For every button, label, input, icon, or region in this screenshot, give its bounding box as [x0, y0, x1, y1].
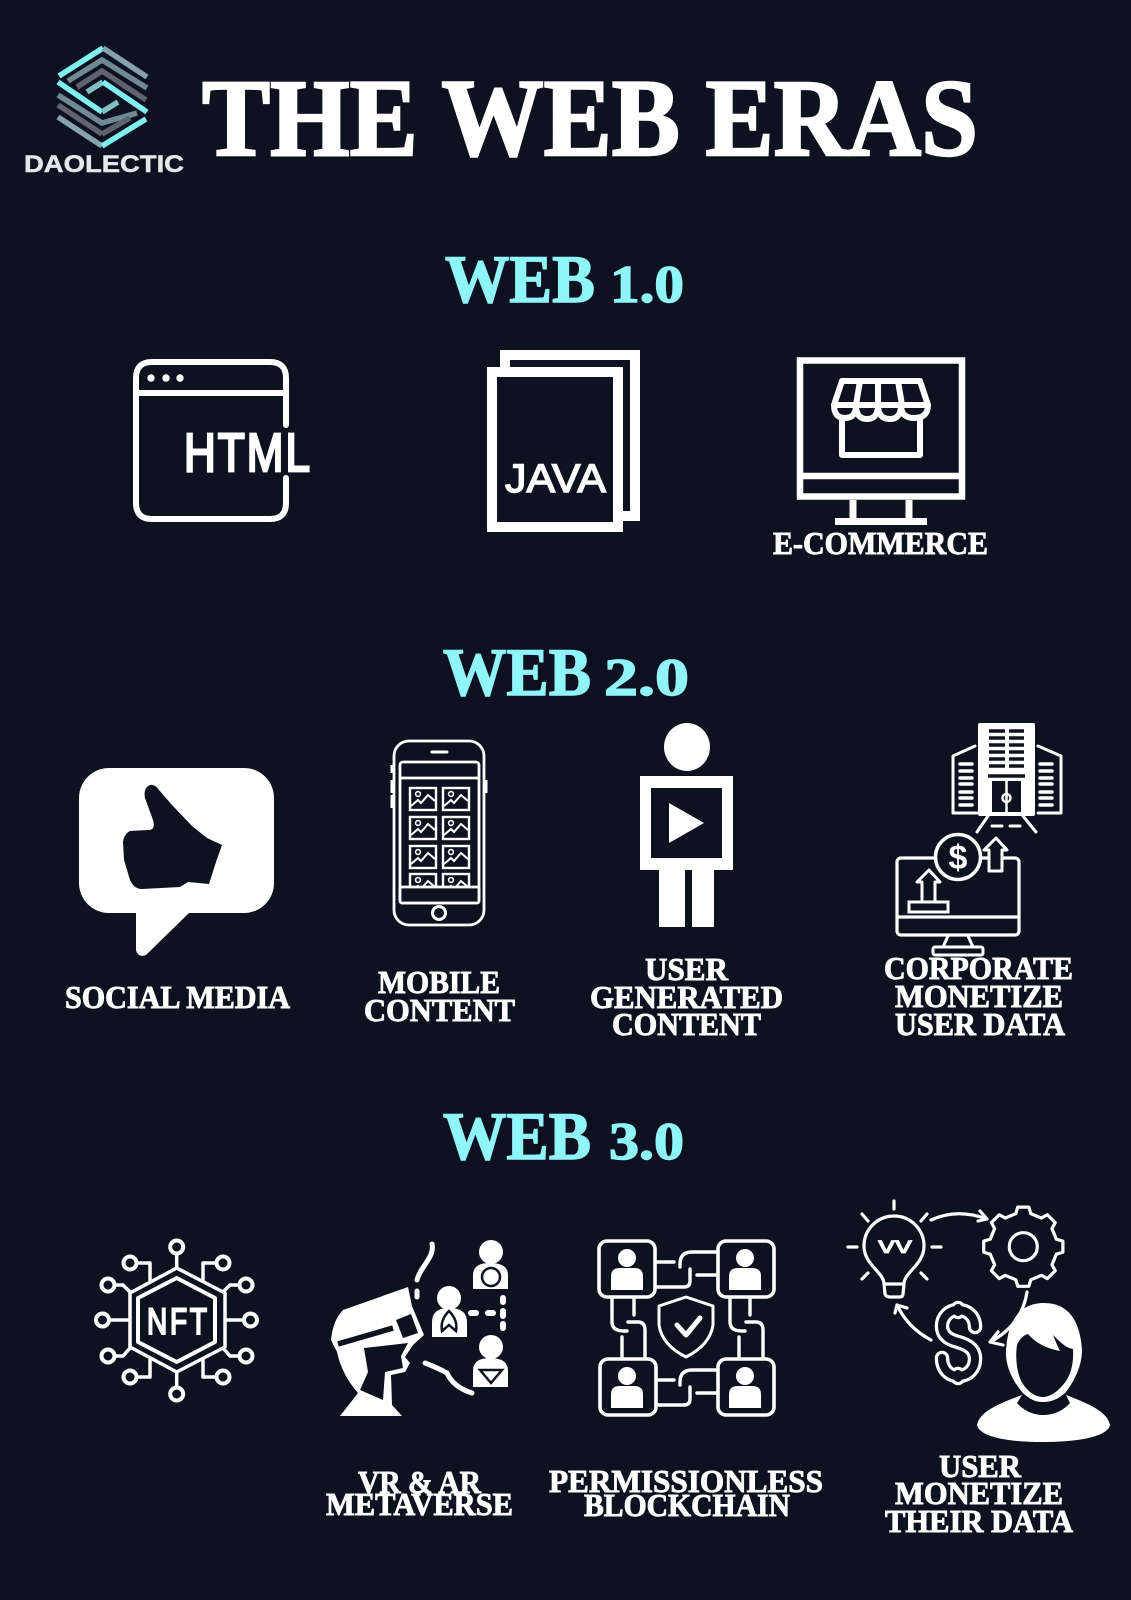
logo wordmark: DAOLECTIC	[24, 151, 184, 178]
lightbulb	[848, 1201, 941, 1297]
arrow: bulb to gear	[931, 1211, 987, 1221]
label: permissionless blockchain: PERMISSIONLESS	[549, 1463, 823, 1499]
heading: Web 1.0	[445, 241, 684, 317]
heading: Web 2.0	[443, 634, 689, 710]
heading: Web 2.0: WEB	[443, 634, 591, 710]
label: mobile content: CONTENT	[364, 992, 515, 1028]
label: user monetize their data: MONETIZE	[895, 1475, 1063, 1511]
label: user generated content	[590, 951, 783, 1042]
gear	[984, 1207, 1063, 1286]
logo: Daolectic	[24, 48, 184, 178]
label: VR & AR metaverse: VR & AR	[358, 1464, 482, 1500]
lightbulb: vv	[878, 1232, 913, 1258]
label: VR & AR metaverse: METAVERSE	[326, 1486, 513, 1522]
label: user monetize their data: THEIR DATA	[885, 1503, 1073, 1539]
label: e-commerce: E-COMMERCE	[773, 525, 988, 561]
icon: outlined dollar symbol	[942, 1308, 975, 1378]
label: permissionless blockchain	[549, 1463, 823, 1523]
heading: Web 3.0: WEB	[443, 1098, 591, 1174]
icon: NFT hexagon circuit: NFT	[147, 1300, 207, 1342]
logo mark	[58, 48, 147, 146]
label: user monetize their data	[885, 1448, 1073, 1539]
label: permissionless blockchain: BLOCKCHAIN	[584, 1487, 790, 1523]
label: user monetize their data: USER	[939, 1448, 1022, 1484]
icon: NFT hexagon circuit	[96, 1240, 257, 1400]
heading: Web 3.0	[443, 1098, 684, 1174]
heading: Web 2.0: 2.0	[604, 649, 689, 707]
icon: HTML browser window	[136, 362, 310, 519]
icon: corporate monetization monitor: $	[949, 839, 968, 877]
icon: person with video play screen	[640, 723, 733, 927]
label: user generated content: USER	[645, 951, 729, 987]
icon: e-commerce monitor with store	[800, 360, 962, 525]
label: VR & AR metaverse	[326, 1464, 513, 1522]
label: corporate monetize user data	[884, 950, 1073, 1042]
label: user generated content: CONTENT	[612, 1006, 761, 1042]
icon: VR and AR metaverse headset user	[331, 1240, 508, 1416]
label: social media: SOCIAL MEDIA	[65, 979, 290, 1015]
icon: mobile phone with pictures	[392, 741, 486, 925]
label: corporate monetize user data: USER DATA	[895, 1006, 1065, 1042]
icon: permissionless blockchain network	[599, 1241, 774, 1415]
heading: Web 3.0: 3.0	[609, 1113, 684, 1171]
label: corporate monetize user data: MONETIZE	[895, 978, 1063, 1014]
icon: HTML browser window: HTML	[184, 424, 310, 483]
icon: corporate building	[953, 723, 1061, 832]
label: user generated content: GENERATED	[590, 979, 783, 1015]
icon: corporate monetization monitor	[897, 834, 1019, 955]
title: THE WEB ERAS	[202, 57, 978, 179]
heading: Web 1.0: WEB	[445, 241, 595, 317]
label: mobile content	[364, 964, 515, 1028]
icon: social media thumbs-up bubble	[79, 768, 274, 956]
label: mobile content: MOBILE	[378, 964, 500, 1000]
user silhouette	[977, 1303, 1110, 1442]
icon: Java document pages: JAVA	[505, 457, 606, 501]
icon: Java document pages	[492, 355, 635, 527]
arrow: gear to user	[990, 1292, 1027, 1345]
label: corporate monetize user data: CORPORATE	[884, 950, 1073, 986]
arrow: dollar to bulb	[895, 1305, 931, 1340]
heading: Web 1.0: 1.0	[610, 256, 684, 314]
icon: user monetizes data cycle	[848, 1201, 1110, 1442]
